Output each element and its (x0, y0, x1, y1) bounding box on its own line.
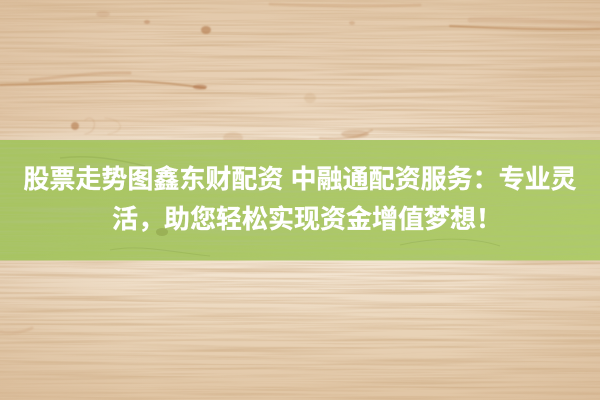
title line 1: 股票走势图鑫东财配资 中融通配资服务：专业灵 (23, 164, 577, 194)
title line 2: 活，助您轻松实现资金增值梦想！ (112, 204, 502, 234)
green banner (0, 140, 600, 260)
